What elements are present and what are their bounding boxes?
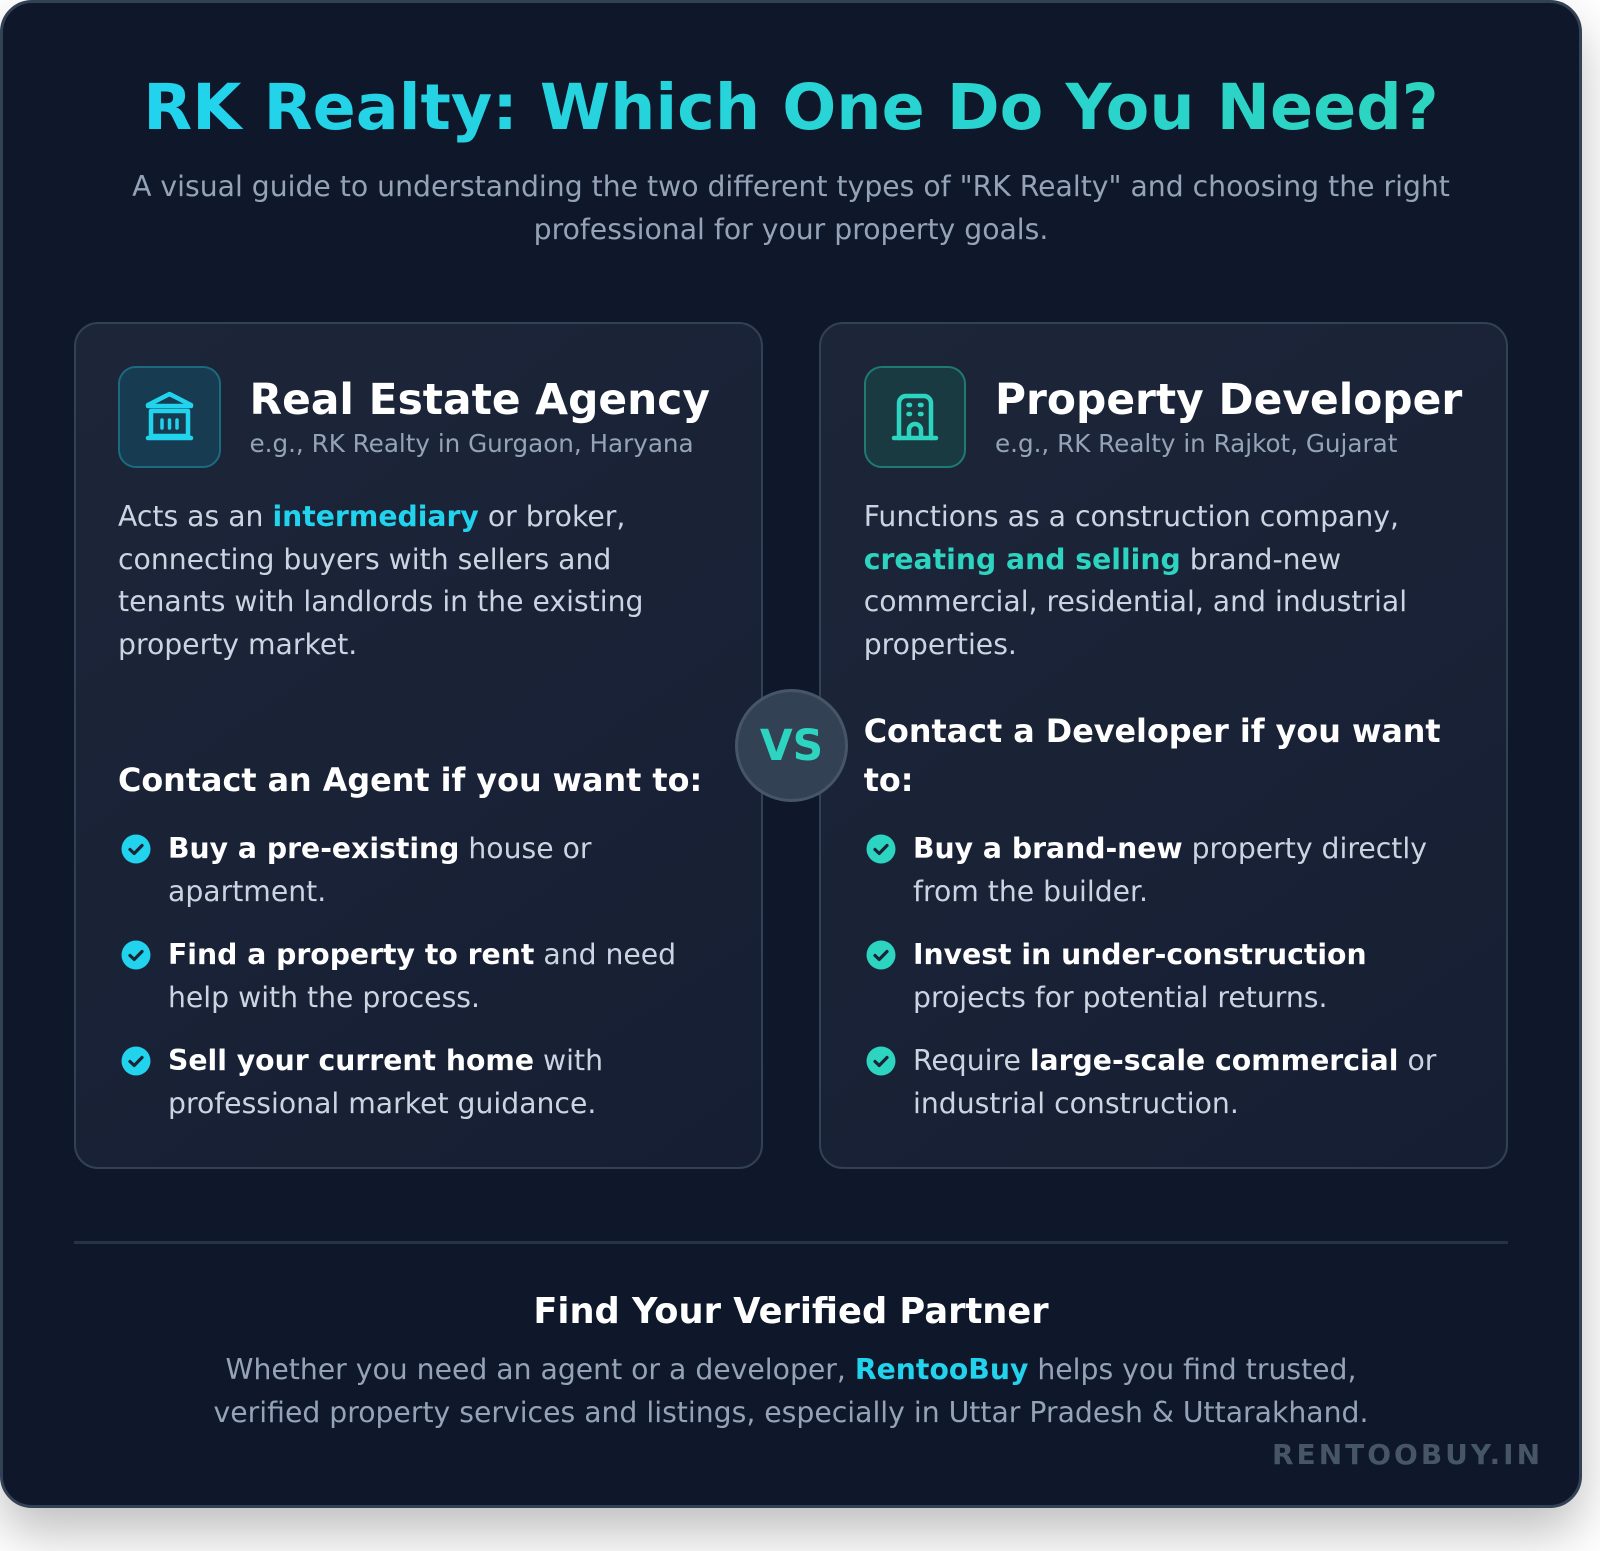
list item <box>913 832 1427 908</box>
check icon <box>866 1046 896 1076</box>
list item: Find a property to rent and need <box>168 938 676 971</box>
list item: Buy a brand-new property directly <box>913 832 1427 865</box>
VS badge: VS <box>760 721 823 770</box>
list item <box>168 1044 603 1120</box>
check icon <box>866 940 896 970</box>
description: agency: property market. <box>118 628 357 661</box>
contact heading: agency: Contact an Agent if you want to: <box>118 762 702 799</box>
heading: agency: Real Estate Agency <box>250 375 710 424</box>
list item: Buy a pre-existing house or <box>168 832 592 865</box>
description: agency <box>118 500 643 661</box>
description: agency: tenants with landlords in the existing <box>118 585 643 618</box>
list item: projects for potential returns. <box>913 981 1328 1014</box>
subtitle: professional for your property goals. <box>534 213 1048 246</box>
list item: Invest in under-construction <box>913 938 1367 971</box>
icon: agency building <box>118 366 221 468</box>
check icon <box>122 1046 150 1076</box>
subheading: developer: e.g., RK Realty in Rajkot, Gujarat <box>995 429 1397 458</box>
watermark: RENTOOBUY.IN <box>1272 1438 1543 1471</box>
contact heading: developer: Contact a Developer if you want <box>864 713 1441 750</box>
list: developer <box>866 832 1436 1120</box>
description: developer: commercial, residential, and industrial <box>864 585 1407 618</box>
description: developer: Functions as a construction company, <box>864 500 1399 533</box>
list item: Require large-scale commercial or <box>913 1044 1436 1077</box>
contact heading: developer: to: <box>864 762 913 799</box>
description: developer: properties. <box>864 628 1017 661</box>
footer text: verified property services and listings, especially in Uttar Pradesh & Uttarakhand. <box>214 1396 1368 1429</box>
subtitle <box>132 170 1450 246</box>
list item <box>913 938 1367 1014</box>
list item: from the builder. <box>913 875 1148 908</box>
panel: real estate agency <box>74 322 763 1169</box>
check icon <box>122 940 150 970</box>
description: developer <box>864 500 1407 661</box>
list item <box>168 938 676 1014</box>
panel: property developer <box>819 322 1508 1169</box>
list item: help with the process. <box>168 981 480 1014</box>
subtitle: A visual guide to understanding the two different types of "RK Realty" and choosing the right <box>132 170 1450 203</box>
footer text: Whether you need an agent or a developer, RentooBuy helps you find trusted, <box>226 1353 1356 1386</box>
list item: professional market guidance. <box>168 1087 596 1120</box>
list item <box>168 832 592 908</box>
footer text <box>214 1353 1368 1429</box>
title: RK Realty: Which One Do You Need? <box>143 70 1439 144</box>
check icon <box>122 834 150 864</box>
subheading: agency: e.g., RK Realty in Gurgaon, Haryana <box>250 429 694 458</box>
list item: apartment. <box>168 875 326 908</box>
contact heading: developer <box>864 713 1441 799</box>
icon: developer office <box>864 366 966 468</box>
description: agency: connecting buyers with sellers and <box>118 543 611 576</box>
list item: industrial construction. <box>913 1087 1239 1120</box>
description: agency: Acts as an intermediary or broker, <box>118 500 625 533</box>
footer heading: Find Your Verified Partner <box>533 1290 1049 1332</box>
list item: Sell your current home with <box>168 1044 603 1077</box>
VS badge <box>735 689 848 802</box>
list item <box>913 1044 1436 1120</box>
list: agency <box>122 832 676 1120</box>
check icon <box>866 834 896 864</box>
description: developer: creating and selling brand-new <box>864 543 1341 576</box>
heading: developer: Property Developer <box>995 375 1462 424</box>
